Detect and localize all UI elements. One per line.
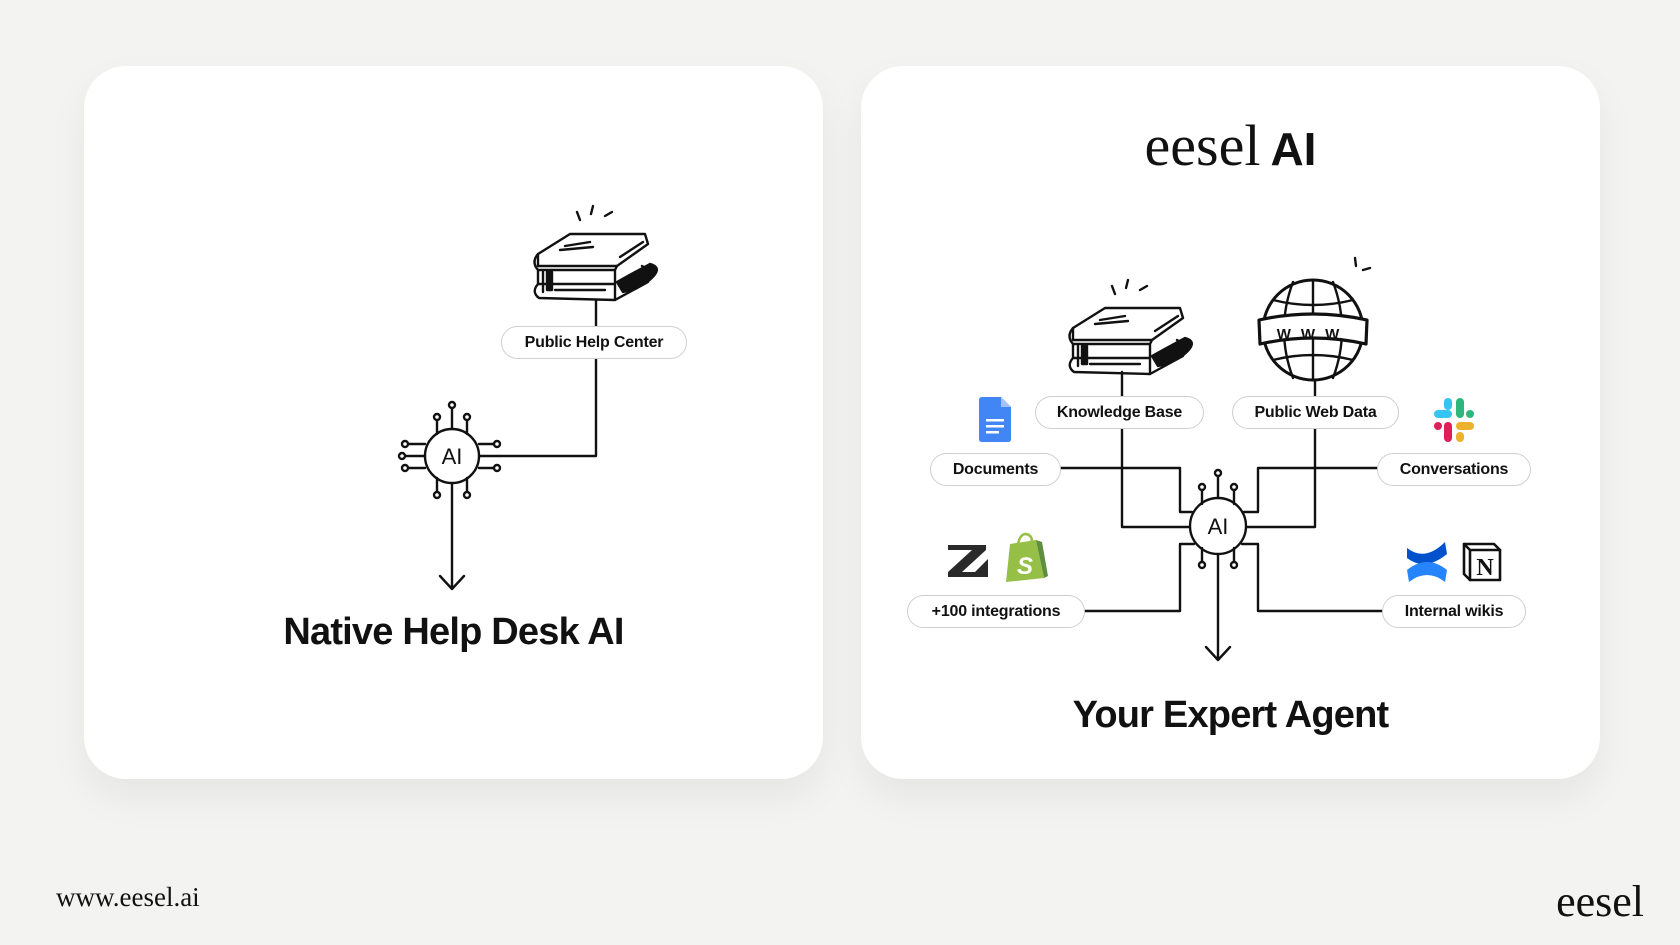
title: your expert agent: Your Expert Agent bbox=[1073, 694, 1388, 736]
heading: eesel AI: eeselAI bbox=[1145, 113, 1316, 178]
panel: native help desk AI bbox=[84, 66, 823, 779]
pill: internal wikis: Internal wikis bbox=[1405, 602, 1503, 620]
icon: AI chip right: AI bbox=[1208, 514, 1228, 539]
pill: public help center: Public Help Center bbox=[525, 334, 663, 350]
icon: books right bbox=[1070, 280, 1192, 374]
pill: internal wikis bbox=[1382, 595, 1526, 628]
pill: knowledge base bbox=[1035, 396, 1204, 429]
pill: documents bbox=[930, 453, 1061, 486]
title: native help desk AI: Native Help Desk AI bbox=[283, 611, 624, 653]
pill: public help center bbox=[501, 326, 687, 359]
pill: public web data bbox=[1232, 396, 1399, 429]
pill: integrations bbox=[907, 595, 1085, 628]
pill: conversations: Conversations bbox=[1400, 460, 1508, 478]
icon: shopify bbox=[1006, 534, 1048, 582]
icon: zendesk bbox=[948, 545, 988, 577]
icon: google docs bbox=[979, 397, 1011, 442]
icon: shopify: S bbox=[1017, 553, 1033, 580]
panel: eesel AI bbox=[861, 66, 1600, 779]
connector lines left bbox=[440, 300, 596, 589]
icon: slack bbox=[1434, 398, 1474, 442]
icon: globe bbox=[1259, 258, 1370, 380]
icon: AI chip left: AI bbox=[442, 444, 462, 469]
icon: AI chip right bbox=[1190, 470, 1246, 568]
icon: books left bbox=[534, 206, 657, 300]
icon: AI chip left bbox=[399, 402, 500, 498]
icon: notion bbox=[1464, 544, 1500, 581]
pill: public web data: Public Web Data bbox=[1254, 404, 1377, 420]
pill: knowledge base: Knowledge Base bbox=[1057, 404, 1182, 420]
icon: notion: N bbox=[1476, 555, 1494, 581]
footer: logo: eesel bbox=[1556, 877, 1644, 926]
pill: integrations: +100 integrations bbox=[932, 602, 1060, 620]
connector lines right bbox=[1061, 372, 1382, 660]
pill: documents: Documents bbox=[953, 460, 1038, 478]
icon: globe: WWW bbox=[1277, 326, 1349, 343]
pill: conversations bbox=[1377, 453, 1531, 486]
footer: url: www.eesel.ai bbox=[56, 882, 200, 912]
icon: confluence bbox=[1407, 542, 1447, 582]
